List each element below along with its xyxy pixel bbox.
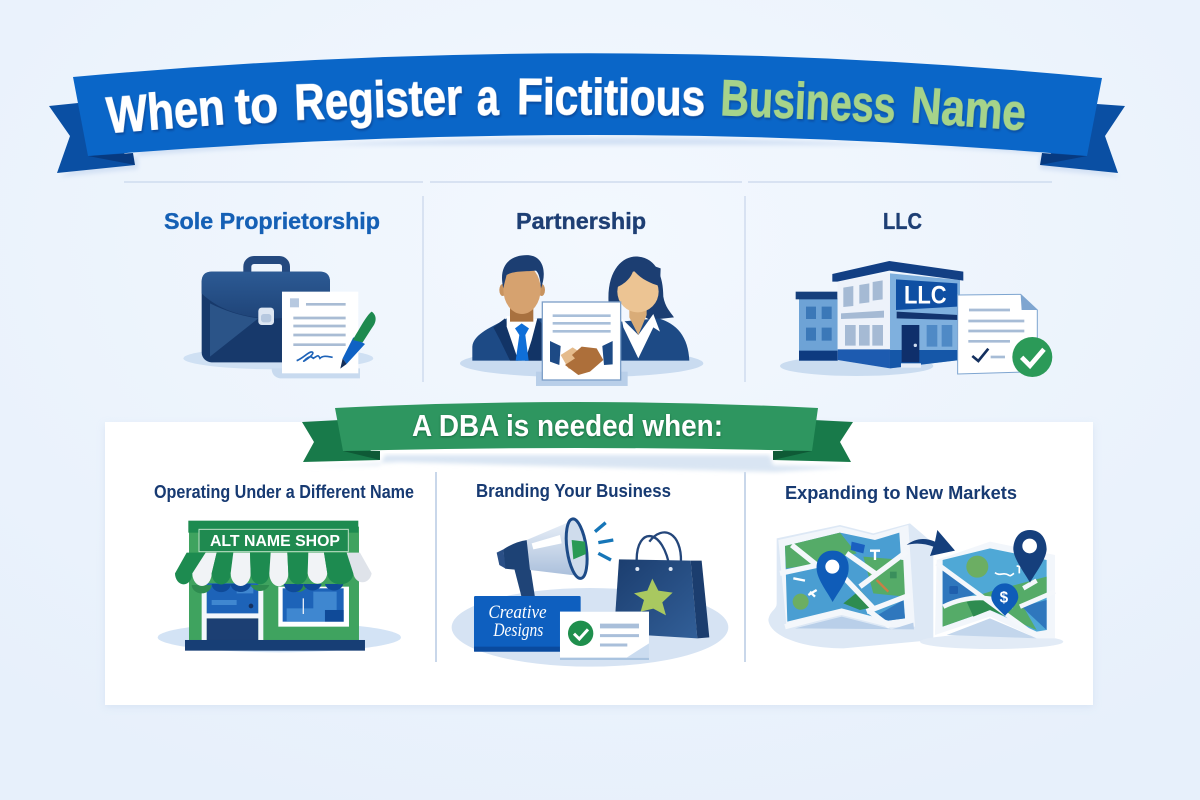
- icon: two partners with handshake document: [460, 255, 703, 386]
- title text: Name: [909, 76, 1028, 141]
- title text: Fictitious: [517, 68, 705, 126]
- panel: llc: [780, 208, 1052, 377]
- icon: megaphone, shopping bag, creative sign and card: Designs: [492, 620, 543, 641]
- panel: partnership: [460, 208, 703, 386]
- panel: sole proprietorship: [164, 208, 380, 378]
- icon: llc building and approved document: [780, 261, 1052, 377]
- icon: llc building and approved document: LLC: [904, 281, 947, 309]
- title text: a: [476, 69, 500, 126]
- icon: maps with pins and arrow: [768, 523, 1063, 649]
- title banner: [49, 53, 1125, 177]
- awning: [175, 553, 372, 586]
- heading: Operating Under a Different Name: [154, 482, 414, 502]
- icon: storefront: [158, 521, 401, 652]
- title text: Register: [293, 68, 463, 131]
- item: operating under a different name: [154, 482, 414, 652]
- right map: [935, 530, 1055, 638]
- green ribbon heading: [302, 402, 853, 472]
- left map: [778, 525, 915, 629]
- title text: Business: [720, 69, 897, 134]
- title text: [104, 68, 1028, 144]
- heading: llc: LLC: [883, 208, 922, 234]
- title text: to: [233, 76, 280, 135]
- icon: megaphone, shopping bag, creative sign and card: [452, 518, 728, 667]
- heading: sole proprietorship: Sole Proprietorship: [164, 208, 380, 234]
- item: branding your business: [452, 481, 728, 667]
- right map: $: [1000, 590, 1009, 607]
- green ribbon heading: A DBA is needed when:: [412, 408, 723, 443]
- icon: storefront: ALT NAME SHOP: [210, 533, 340, 550]
- icon: briefcase and signed document: [183, 260, 376, 378]
- left wing: [799, 298, 838, 361]
- title text: When: [104, 78, 226, 144]
- heading: partnership: Partnership: [516, 208, 646, 234]
- icon: megaphone, shopping bag, creative sign and card: Creative: [488, 602, 547, 623]
- arrow: [907, 530, 955, 556]
- heading: Branding Your Business: [476, 481, 671, 501]
- item: expanding to new markets: [768, 483, 1063, 649]
- man: [472, 255, 545, 361]
- heading: Expanding to New Markets: [785, 483, 1017, 503]
- woman: [608, 257, 689, 361]
- panel: a DBA is needed when: [105, 402, 1093, 707]
